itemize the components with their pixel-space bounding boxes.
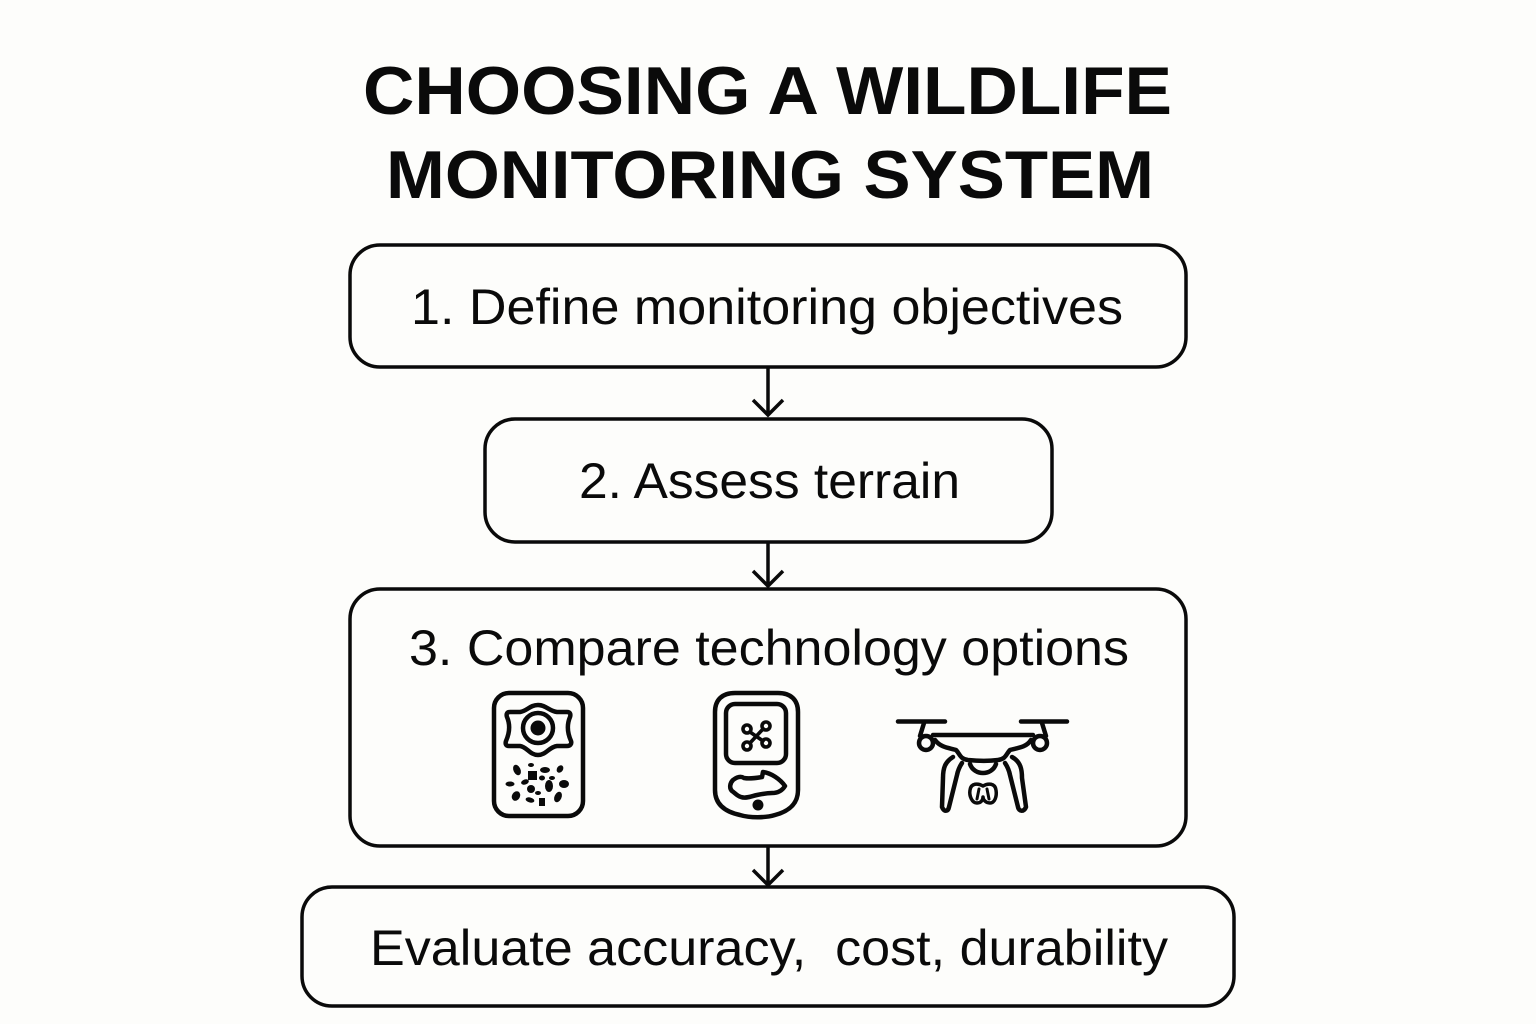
icon: camera trap [494,693,583,816]
arrow: step 3 to evaluation [753,847,783,885]
evaluation box [302,887,1234,1006]
step 2 box [485,419,1052,542]
step 2 box: 2. Assess terrain [579,453,960,509]
title [363,53,1172,213]
icon: drone [898,722,1067,811]
title: CHOOSING A WILDLIFE [363,53,1172,129]
step 3 heading: 3. Compare technology options [409,620,1129,676]
step 1 box: 1. Define monitoring objectives [411,279,1123,335]
step 3 panel [350,589,1186,846]
step 1 box [350,245,1186,367]
icon: GPS tracker [715,693,798,817]
evaluation box: Evaluate accuracy, cost, durability [370,920,1168,976]
arrow: step 1 to step 2 [753,368,783,415]
title: MONITORING SYSTEM [386,137,1154,213]
arrow: step 2 to step 3 [753,543,783,586]
